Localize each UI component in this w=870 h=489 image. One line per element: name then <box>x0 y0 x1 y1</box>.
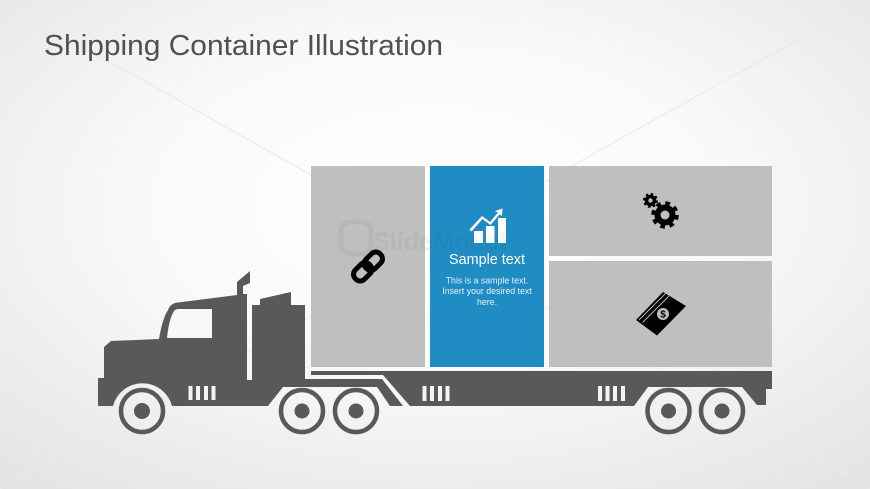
vent: trailer rear <box>598 386 625 401</box>
wheel: tractor rear 2 <box>335 390 377 432</box>
panel body text: Insert your desired text <box>442 286 532 296</box>
panel: sample text container <box>430 166 544 367</box>
panel body text <box>442 276 532 307</box>
watermark <box>341 222 506 256</box>
wheel: tractor front <box>121 390 163 432</box>
truck windshield <box>167 309 212 338</box>
panel heading: Sample text <box>449 252 525 268</box>
icon: chain link <box>351 250 385 283</box>
trailer chassis <box>311 371 772 406</box>
panel: link container <box>311 166 425 367</box>
watermark: SlideModel <box>373 228 506 256</box>
panel: money container <box>549 261 772 367</box>
panel body text: here. <box>477 297 497 307</box>
wheel: trailer rear 2 <box>701 390 743 432</box>
vent: tractor <box>188 386 216 400</box>
truck tractor body <box>98 271 403 406</box>
wheel: trailer rear 1 <box>648 390 690 432</box>
icon: growth chart <box>470 208 506 243</box>
icon: banknotes <box>636 292 686 336</box>
panel body text: This is a sample text. <box>446 276 528 286</box>
title: Shipping Container Illustration <box>44 30 443 62</box>
panel: gears container <box>549 166 772 256</box>
icon: banknotes: $ <box>660 310 666 320</box>
wheel: tractor rear 1 <box>281 390 323 432</box>
vent: trailer middle <box>422 386 450 401</box>
icon: gears <box>644 194 676 226</box>
